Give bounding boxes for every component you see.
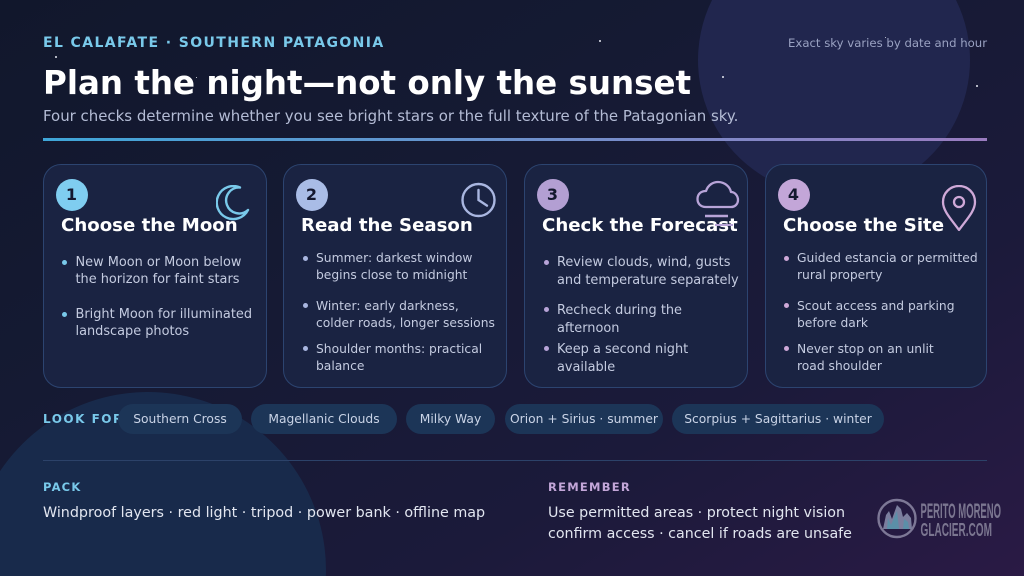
remember text: Use permitted areas · protect night vision <box>548 504 845 520</box>
bullets: Scout access and parking <box>797 299 955 313</box>
number badge 4 <box>778 178 810 210</box>
bullets: balance <box>316 359 364 373</box>
remember label: REMEMBER <box>548 480 631 494</box>
panel: choose the site <box>765 164 987 388</box>
subtitle: Four checks determine whether you see bright stars or the full texture of the Patagonian sky. <box>43 106 738 124</box>
icon: moon <box>216 185 250 220</box>
panel: choose the moon <box>43 164 267 388</box>
label: look for: LOOK FOR <box>43 412 124 426</box>
chip: scorpius + sagittarius <box>672 404 884 434</box>
note: sky varies: Exact sky varies by date and hour <box>788 36 987 50</box>
bullets: the horizon for faint stars <box>76 272 239 287</box>
bullets: Guided estancia or permitted <box>797 251 978 265</box>
chip: southern cross: Southern Cross <box>133 412 227 426</box>
bullets: begins close to midnight <box>316 268 467 282</box>
pack text: Windproof layers · red light · tripod · power bank · offline map <box>43 504 485 520</box>
bullets <box>784 251 978 373</box>
panel: read the season <box>283 164 507 388</box>
title: Plan the night—not only the sunset <box>43 64 691 102</box>
logo mark <box>878 500 916 537</box>
bullets: Shoulder months: practical <box>316 342 482 356</box>
pack label: PACK <box>43 480 81 494</box>
bullets: colder roads, longer sessions <box>316 316 495 330</box>
bullets: and temperature separately <box>557 272 739 288</box>
chip: scorpius + sagittarius: Scorpius + Sagittarius · winter <box>684 412 872 426</box>
remember text: confirm access · cancel if roads are unsafe <box>548 526 852 542</box>
bullets: before dark <box>797 316 868 330</box>
bullets: landscape photos <box>76 324 189 339</box>
chip: southern cross <box>118 404 242 434</box>
number badge 1: 1 <box>66 184 77 204</box>
stars <box>55 36 978 87</box>
icon: clock <box>461 182 496 218</box>
heading: choose the moon: Choose the Moon <box>61 215 238 236</box>
bullets: Keep a second night <box>557 342 688 357</box>
bullets: Recheck during the <box>557 303 682 318</box>
bullets <box>62 255 252 339</box>
panel: check the forecast <box>524 164 748 388</box>
chip: orion + sirius: Orion + Sirius · summer <box>510 412 658 426</box>
heading: choose the site: Choose the Site <box>783 215 944 236</box>
footer rule <box>43 460 987 461</box>
icon: map pin <box>942 185 976 231</box>
header rule <box>43 138 987 141</box>
remember block <box>548 480 852 542</box>
bullets <box>303 251 495 373</box>
bullets: Never stop on an unlit <box>797 342 934 356</box>
chip: magellanic clouds <box>251 404 397 434</box>
bullets <box>544 255 739 374</box>
number badge 3 <box>536 178 568 210</box>
chip: milky way <box>406 404 495 434</box>
heading: read the season: Read the Season <box>301 215 473 236</box>
number badge 3: 3 <box>547 184 558 204</box>
number badge 2 <box>296 178 328 210</box>
remember text <box>548 504 852 542</box>
bullets: Bright Moon for illuminated <box>76 307 252 322</box>
pack block <box>43 480 485 520</box>
logo text <box>920 500 1001 540</box>
bullets: Review clouds, wind, gusts <box>557 255 730 270</box>
chip: milky way: Milky Way <box>420 412 481 426</box>
bullets: New Moon or Moon below <box>76 255 241 270</box>
number badge 4: 4 <box>788 184 799 204</box>
chip: magellanic clouds: Magellanic Clouds <box>268 412 380 426</box>
heading: check the forecast: Check the Forecast <box>542 215 738 236</box>
logo: perito moreno glacier <box>877 498 1001 540</box>
icon: cloud <box>696 180 740 226</box>
bullets: afternoon <box>557 320 619 336</box>
bullets: road shoulder <box>797 359 882 373</box>
eyebrow: EL CALAFATE · SOUTHERN PATAGONIA <box>43 35 385 51</box>
bullets: Winter: early darkness, <box>316 299 459 313</box>
chip: orion + sirius <box>505 404 663 434</box>
bullets: Summer: darkest window <box>316 251 472 265</box>
number badge 2: 2 <box>306 184 317 204</box>
number badge 1 <box>56 178 88 210</box>
bullets: rural property <box>797 268 882 282</box>
bullets: available <box>557 360 615 374</box>
